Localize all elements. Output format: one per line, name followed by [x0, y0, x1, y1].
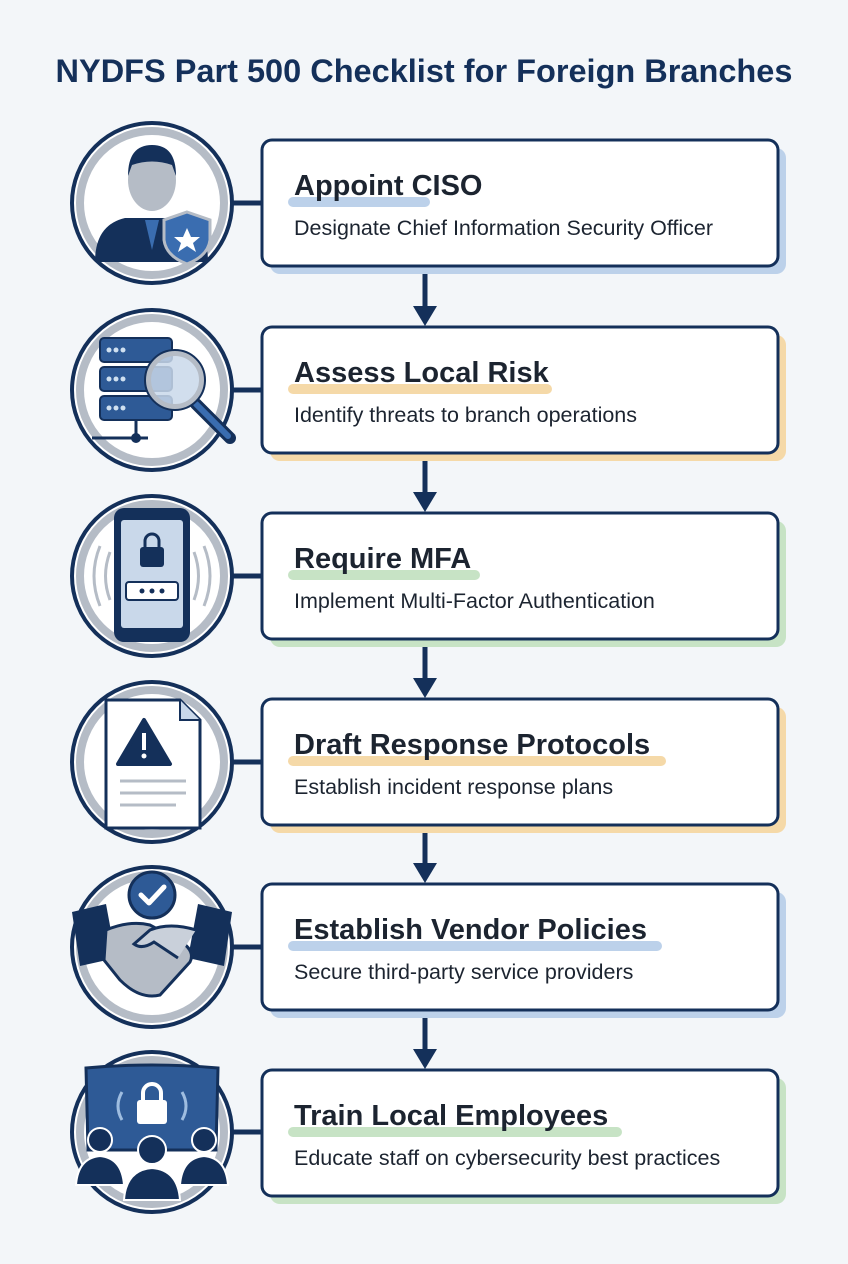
step 5: Establish Vendor Policies [72, 867, 262, 1027]
card: Train Local Employees: Train Local Employees [294, 1100, 608, 1132]
card: Draft Response Protocols [262, 699, 786, 833]
icon: handshake with check [72, 872, 232, 996]
card: Establish Vendor Policies [262, 884, 786, 1018]
card: Train Local Employees [262, 1070, 786, 1204]
arrows between cards [413, 267, 437, 1069]
step 1: Appoint CISO [72, 123, 262, 283]
card: Appoint CISO [262, 140, 786, 274]
icon: screen with lock and people [76, 1065, 228, 1200]
title: NYDFS Part 500 Checklist for Foreign Branches [56, 53, 792, 89]
card: Draft Response Protocols: Establish incident response plans [294, 775, 613, 799]
card: Establish Vendor Policies: Establish Vendor Policies [294, 914, 647, 946]
icon: officer with shield [95, 145, 210, 264]
card: Assess Local Risk: Identify threats to branch operations [294, 403, 637, 427]
card: Require MFA: Require MFA [294, 543, 471, 575]
icon: phone with lock [94, 508, 210, 642]
icon: servers with magnifier [92, 338, 230, 443]
step 2: Assess Local Risk [72, 310, 262, 470]
card: Appoint CISO: Appoint CISO [294, 170, 482, 202]
card: Draft Response Protocols: Draft Response Protocols [294, 729, 650, 761]
card: Assess Local Risk: Assess Local Risk [294, 357, 550, 389]
step 6: Train Local Employees [72, 1052, 262, 1212]
step 4: Draft Response Protocols [72, 682, 262, 842]
step 3: Require MFA [72, 496, 262, 656]
card: Require MFA: Implement Multi-Factor Authentication [294, 589, 655, 613]
card: Establish Vendor Policies: Secure third-party service providers [294, 960, 633, 984]
card: Train Local Employees: Educate staff on cybersecurity best practices [294, 1146, 720, 1170]
icon: document with warning [106, 700, 200, 828]
card: Assess Local Risk [262, 327, 786, 461]
card: Require MFA [262, 513, 786, 647]
card: Appoint CISO: Designate Chief Information Security Officer [294, 216, 713, 240]
